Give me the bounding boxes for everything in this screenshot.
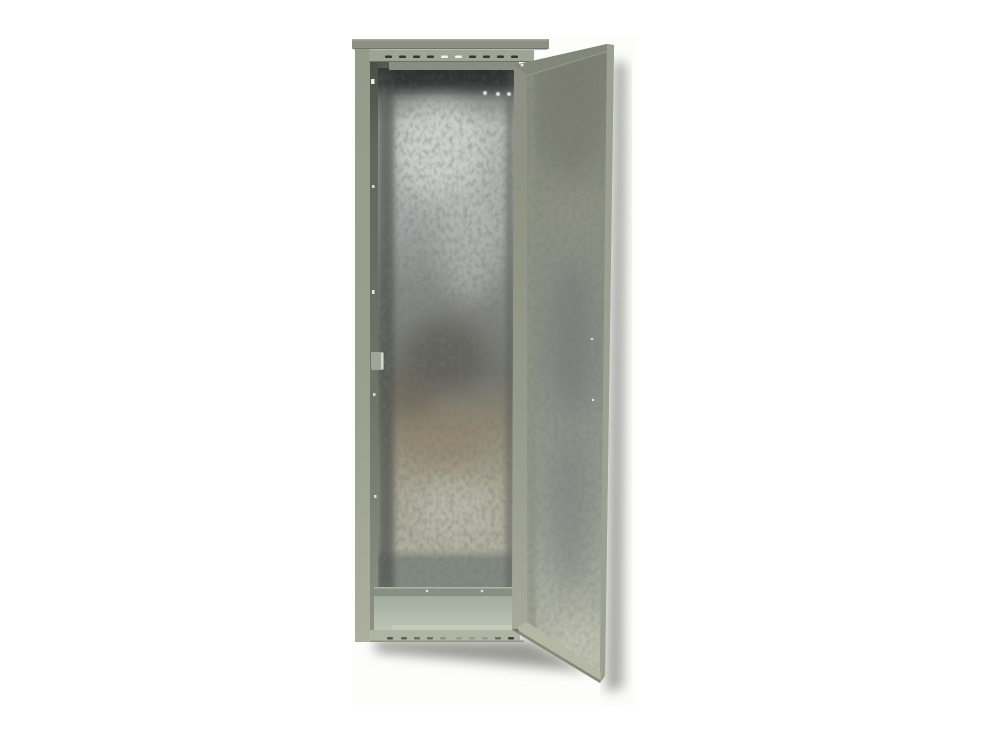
open door bbox=[512, 44, 614, 683]
cast shadows bbox=[375, 60, 626, 692]
cabinet left wall bbox=[355, 49, 378, 642]
door inner panel bbox=[527, 50, 609, 675]
lower slotted rail bbox=[370, 630, 524, 642]
cabinet roof bbox=[352, 39, 549, 50]
cabinet interior base bbox=[369, 60, 519, 635]
door frame bbox=[512, 44, 614, 683]
galvanised back panel bbox=[378, 66, 514, 593]
upper slotted rail bbox=[369, 50, 534, 70]
latch tab bbox=[371, 352, 384, 370]
door left return bbox=[512, 62, 527, 630]
illustration: open metal cabinet bbox=[352, 39, 632, 700]
lower shelf and floor bbox=[374, 587, 514, 630]
door edge highlights bbox=[514, 44, 607, 75]
